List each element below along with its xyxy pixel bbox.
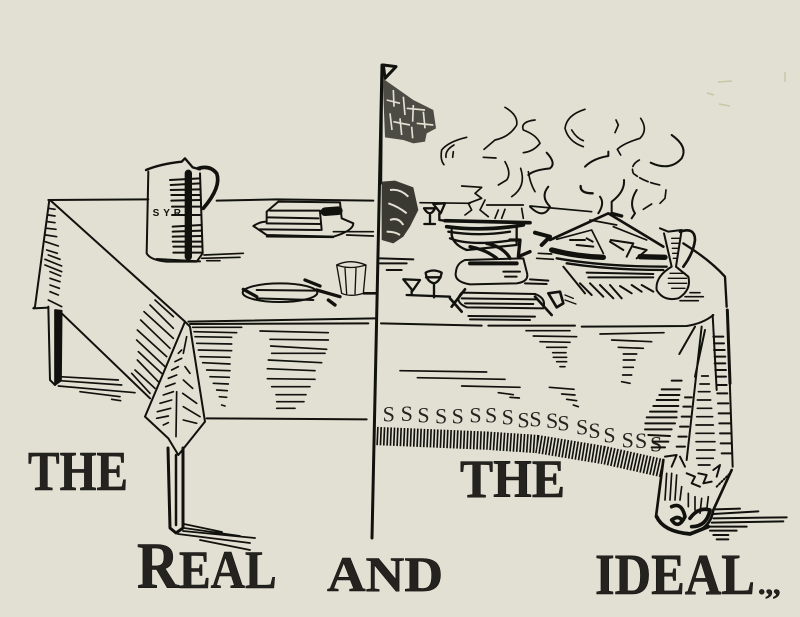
leg shadow — [58, 377, 135, 401]
decorative letter border on cloth: SSSSSSSSSSSSSSSSSS — [383, 401, 662, 457]
steam rising — [441, 107, 684, 218]
pitcher labelled syrup — [146, 158, 243, 262]
dinner plate with cutlery — [450, 289, 576, 320]
heading: the (left): THE — [28, 441, 128, 503]
wine glasses in front — [403, 270, 450, 297]
ornamental centerpiece — [380, 181, 418, 270]
shaded cloth folds — [526, 331, 577, 367]
heading: ideal: IDEAL — [595, 542, 755, 607]
plate with knife and fork — [243, 280, 340, 305]
soup tureen on stand — [445, 221, 548, 284]
fringe — [377, 436, 663, 468]
heading: and: AND — [327, 546, 443, 602]
panel: the ideal table, cloth and fringe — [377, 310, 787, 539]
stack of griddle cakes on plate — [253, 202, 373, 237]
front edge of the table — [381, 315, 713, 327]
tablecloth left drape — [33, 200, 185, 398]
ornate ewer — [657, 228, 703, 301]
left front leg and shadow — [168, 448, 255, 550]
far table edge — [420, 203, 592, 212]
draped table foot — [656, 460, 732, 534]
left table leg — [55, 310, 62, 385]
central dividing pole — [372, 65, 382, 538]
roast on platter under cover — [535, 213, 667, 298]
panel: the ideal table, upper part — [380, 65, 727, 320]
fringed flag on pole — [381, 65, 436, 183]
heading: real: REAL — [137, 531, 277, 603]
table top edge — [48, 199, 373, 201]
cloth fold hatching — [132, 300, 173, 393]
closing flourish: .,, — [758, 568, 780, 601]
pitcher label: SYR — [153, 208, 181, 219]
front edge of the table — [188, 318, 375, 419]
corner flap — [145, 322, 205, 455]
shaded cloth folds — [193, 327, 242, 406]
panel: the real table — [33, 158, 377, 455]
wine glasses behind — [424, 203, 445, 224]
foot shadow — [710, 509, 787, 539]
pitcher shading — [157, 178, 202, 261]
heading: the (right): THE — [460, 449, 565, 509]
paper marks — [707, 72, 785, 106]
drinking glass — [337, 262, 377, 295]
pitcher handle — [198, 167, 218, 208]
drape hatching — [45, 208, 62, 307]
rounded table end — [683, 243, 727, 307]
side drape — [645, 310, 733, 487]
